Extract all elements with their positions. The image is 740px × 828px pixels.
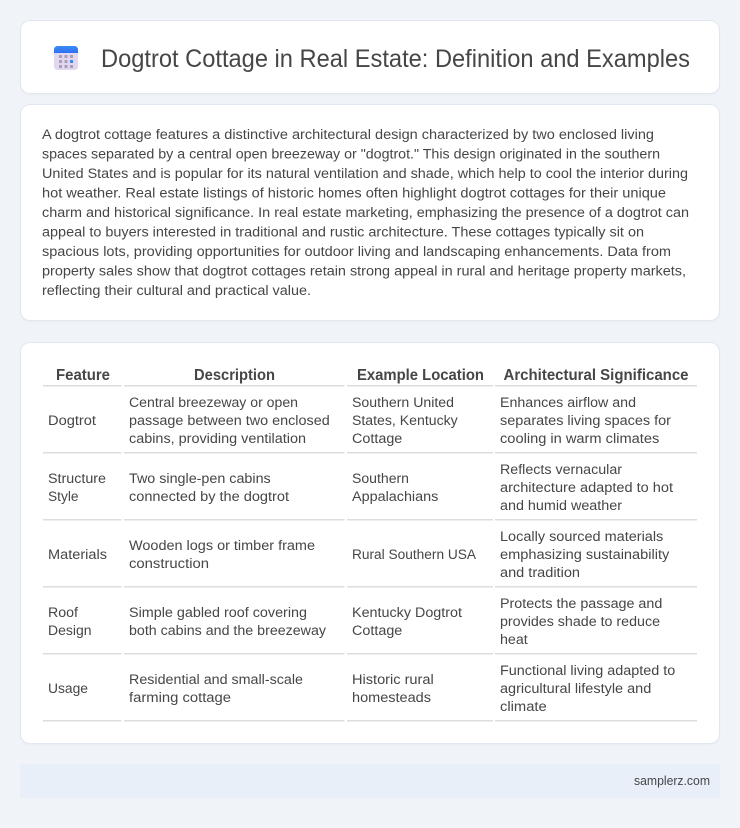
intro paragraph: reflecting their cultural and practical value. bbox=[42, 283, 311, 299]
table row: Roof Design bbox=[48, 596, 662, 648]
table row: Usage: homesteads bbox=[352, 690, 431, 706]
table header row: Description bbox=[194, 367, 275, 384]
table row: Structure Style: Two single-pen cabins bbox=[129, 471, 271, 487]
table row: Usage bbox=[48, 663, 675, 715]
intro paragraph: spaces separated by a central open breezeway or "dogtrot." This design originated in the southern bbox=[42, 146, 660, 162]
table row: Dogtrot: separates living spaces for bbox=[500, 413, 671, 429]
table row: Dogtrot: passage between two enclosed bbox=[129, 413, 330, 429]
table row: Dogtrot: Central breezeway or open bbox=[129, 395, 298, 411]
table row: Structure Style: Southern bbox=[352, 471, 409, 487]
table row: Materials: construction bbox=[129, 556, 209, 572]
title: Dogtrot Cottage in Real Estate: Definition and Examples bbox=[101, 45, 690, 73]
table row: Roof Design: Protects the passage and bbox=[500, 596, 662, 612]
table row: Usage: farming cottage bbox=[129, 690, 231, 706]
intro paragraph bbox=[42, 127, 689, 299]
table row: Roof Design: Cottage bbox=[352, 623, 402, 639]
table row: Structure Style: and humid weather bbox=[500, 498, 622, 514]
table row: Structure Style: Structure bbox=[48, 471, 106, 487]
table row: Materials: and tradition bbox=[500, 565, 580, 581]
table header row bbox=[56, 367, 689, 384]
table row: Structure Style: Style bbox=[48, 489, 79, 505]
table row: Usage: climate bbox=[500, 699, 547, 715]
table row: Materials: Materials bbox=[48, 547, 107, 563]
table row: Roof Design: Design bbox=[48, 623, 92, 639]
table row: Dogtrot: States, Kentucky bbox=[352, 413, 459, 429]
table row: Roof Design: Roof bbox=[48, 605, 78, 621]
intro paragraph: appeal to buyers interested in traditional and rustic architecture. These cottages typically sit on bbox=[42, 224, 644, 240]
table row: Usage: agricultural lifestyle and bbox=[500, 681, 651, 697]
intro panel bbox=[20, 104, 720, 321]
table row: Roof Design: Simple gabled roof covering bbox=[129, 605, 307, 621]
table row: Dogtrot bbox=[48, 395, 671, 447]
intro paragraph: charm and historical significance. In real estate marketing, emphasizing the presence of a dogtrot can bbox=[42, 205, 689, 221]
table row: Materials: Rural Southern USA bbox=[352, 547, 477, 563]
intro paragraph: hot weather. Real estate listings of historic homes often highlight dogtrot cottages for their unique bbox=[42, 186, 666, 202]
table row: Structure Style: architecture adapted to hot bbox=[500, 480, 673, 496]
table row: Roof Design: both cabins and the breezeway bbox=[129, 623, 327, 639]
table row: Roof Design: provides shade to reduce bbox=[500, 614, 660, 630]
header panel bbox=[20, 20, 720, 94]
table row: Materials: emphasizing sustainability bbox=[500, 547, 670, 563]
table row: Dogtrot: Dogtrot bbox=[48, 413, 96, 429]
table row: Structure Style bbox=[48, 462, 673, 514]
table row: Dogtrot: Cottage bbox=[352, 431, 402, 447]
table row: Usage: Functional living adapted to bbox=[500, 663, 675, 679]
table row: Usage: Residential and small-scale bbox=[129, 672, 303, 688]
table header row: Example Location bbox=[357, 367, 484, 384]
table row: Materials bbox=[48, 529, 670, 581]
table row: Usage: Usage bbox=[48, 681, 88, 697]
table header row: Architectural Significance bbox=[504, 367, 689, 384]
intro paragraph: spacious lots, providing opportunities for outdoor living and landscaping enhancements. Data from bbox=[42, 244, 671, 260]
table row: Dogtrot: Enhances airflow and bbox=[500, 395, 636, 411]
table row: Roof Design: heat bbox=[500, 632, 528, 648]
table row: Usage: Historic rural bbox=[352, 672, 434, 688]
table row: Materials: Wooden logs or timber frame bbox=[129, 538, 315, 554]
table row: Structure Style: Appalachians bbox=[352, 489, 438, 505]
intro paragraph: property sales show that dogtrot cottages retain strong appeal in rural and heritage property markets, bbox=[42, 264, 686, 280]
table row: Dogtrot: cabins, providing ventilation bbox=[129, 431, 306, 447]
footer text: samplerz.com bbox=[634, 774, 710, 788]
table row: Dogtrot: Southern United bbox=[352, 395, 454, 411]
table row: Structure Style: connected by the dogtrot bbox=[129, 489, 289, 505]
icon: calendar bbox=[54, 46, 78, 70]
table panel bbox=[20, 342, 720, 744]
table header row: Feature bbox=[56, 367, 110, 384]
intro paragraph: United States and is popular for its natural ventilation and shade, which help to cool the interior during bbox=[42, 166, 688, 182]
table row: Roof Design: Kentucky Dogtrot bbox=[352, 605, 462, 621]
table row: Dogtrot: cooling in warm climates bbox=[500, 431, 659, 447]
footer bar bbox=[20, 764, 720, 798]
table row: Materials: Locally sourced materials bbox=[500, 529, 663, 545]
intro paragraph: A dogtrot cottage features a distinctive architectural design characterized by two enclosed living bbox=[42, 127, 654, 143]
table row: Structure Style: Reflects vernacular bbox=[500, 462, 622, 478]
